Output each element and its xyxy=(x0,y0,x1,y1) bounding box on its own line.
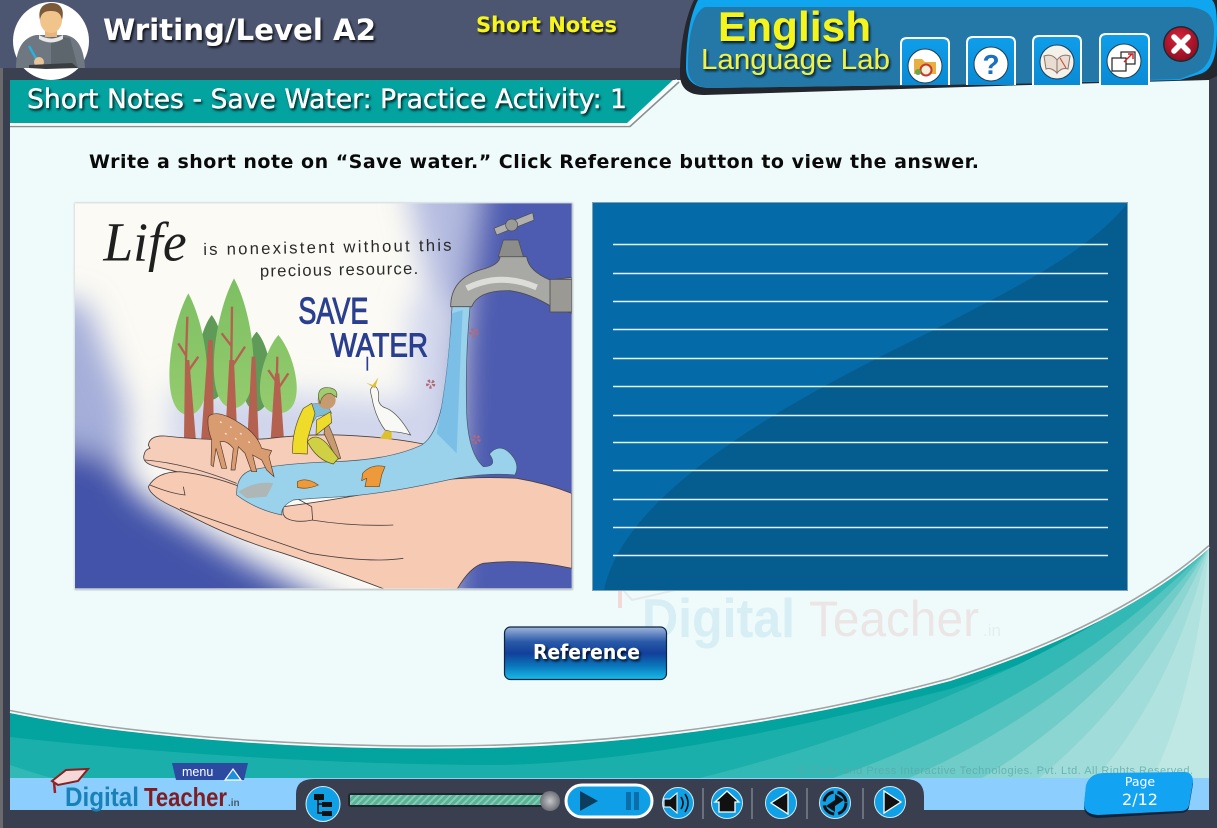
close button xyxy=(1163,26,1199,62)
watermark: Digital Teacher: Digital xyxy=(642,587,795,649)
trees xyxy=(169,278,297,439)
tab button: window xyxy=(1100,34,1149,85)
paper and blue crayon background xyxy=(75,203,572,588)
water stream and pool xyxy=(237,307,517,515)
flowers xyxy=(428,330,479,442)
page number tab: Page xyxy=(1125,774,1155,789)
fish xyxy=(297,466,385,488)
logo: Digital Teacher: Teacher xyxy=(144,782,227,812)
front hand xyxy=(148,472,572,590)
watermark: Digital Teacher: Teacher xyxy=(809,591,979,647)
tab button: book xyxy=(1033,36,1081,85)
drawn heading: SAVE: SAVE xyxy=(298,289,368,331)
refresh button xyxy=(820,788,850,818)
heading: Short Notes: Short Notes xyxy=(476,13,617,37)
duck xyxy=(366,377,411,439)
menu tab: menu xyxy=(182,765,213,779)
copyright: © Code and Press Interactive Technologies. Pvt. Ltd. All Rights Reserved. xyxy=(799,765,1193,777)
writing panel xyxy=(592,202,1128,590)
watermark: Digital Teacher xyxy=(616,562,1001,649)
handwritten caption: Life: Life xyxy=(102,212,187,273)
logo: Digital Teacher: .in xyxy=(228,798,240,809)
tab button: help: ? xyxy=(982,49,1000,80)
title text: Short Notes - Save Water: Practice Activity: 1 xyxy=(27,84,627,115)
page number tab: 2/12 xyxy=(1122,790,1158,809)
Reference button: Reference xyxy=(533,640,640,664)
drawn heading: WATER: WATER xyxy=(331,328,428,365)
watermark: Digital Teacher: .in xyxy=(983,621,1001,640)
deer xyxy=(208,414,274,477)
menu tab xyxy=(172,763,248,780)
woman with pot xyxy=(293,388,341,464)
previous button xyxy=(766,788,796,818)
logo text: Language Lab: Language Lab xyxy=(701,44,890,76)
play pause control xyxy=(566,785,652,817)
back hand xyxy=(143,434,423,485)
illustration: save water drawing xyxy=(74,202,574,591)
heading: Writing/Level A2: Writing/Level A2 xyxy=(103,13,376,47)
control bar xyxy=(296,779,924,828)
instruction text: Write a short note on “Save water.” Click Reference button to view the answer. xyxy=(89,151,979,173)
logo: Digital Teacher xyxy=(52,769,240,812)
logo: Digital Teacher: Digital xyxy=(65,782,139,812)
bottom light strip xyxy=(10,778,1209,810)
ruled lines xyxy=(613,244,1108,556)
tree menu button xyxy=(306,786,340,822)
avatar: writing student xyxy=(13,2,89,80)
title band xyxy=(10,80,679,126)
next button xyxy=(874,786,906,818)
home button xyxy=(712,788,742,818)
water tap xyxy=(451,213,572,313)
bottom swoosh xyxy=(10,540,1209,780)
progress slider xyxy=(348,791,560,811)
speaker button xyxy=(662,788,694,818)
handwritten caption: precious resource.: precious resource. xyxy=(260,259,418,281)
logo text: English: English xyxy=(718,3,871,50)
page number tab xyxy=(1084,772,1193,818)
English Language Lab header panel xyxy=(680,0,1217,95)
tab button: help xyxy=(967,37,1015,85)
handwritten caption: is nonexistent without this: is nonexistent without this xyxy=(203,236,452,259)
tab button: folder clock xyxy=(901,38,949,85)
Reference button xyxy=(504,627,666,680)
